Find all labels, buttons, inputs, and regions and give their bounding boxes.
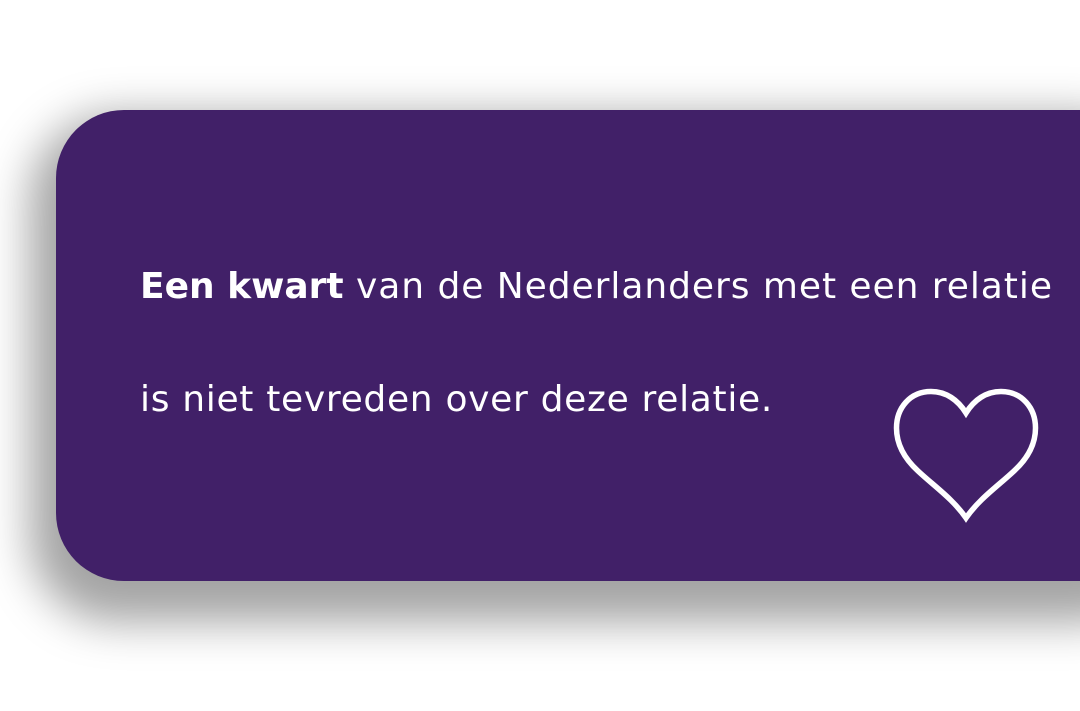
panel: purple card	[56, 110, 1080, 581]
text line 1: Een kwart van de Nederlanders met een relatie	[140, 266, 1053, 307]
icon: heart outline	[894, 388, 1038, 523]
text line 2: is niet tevreden over deze relatie.	[140, 379, 773, 420]
